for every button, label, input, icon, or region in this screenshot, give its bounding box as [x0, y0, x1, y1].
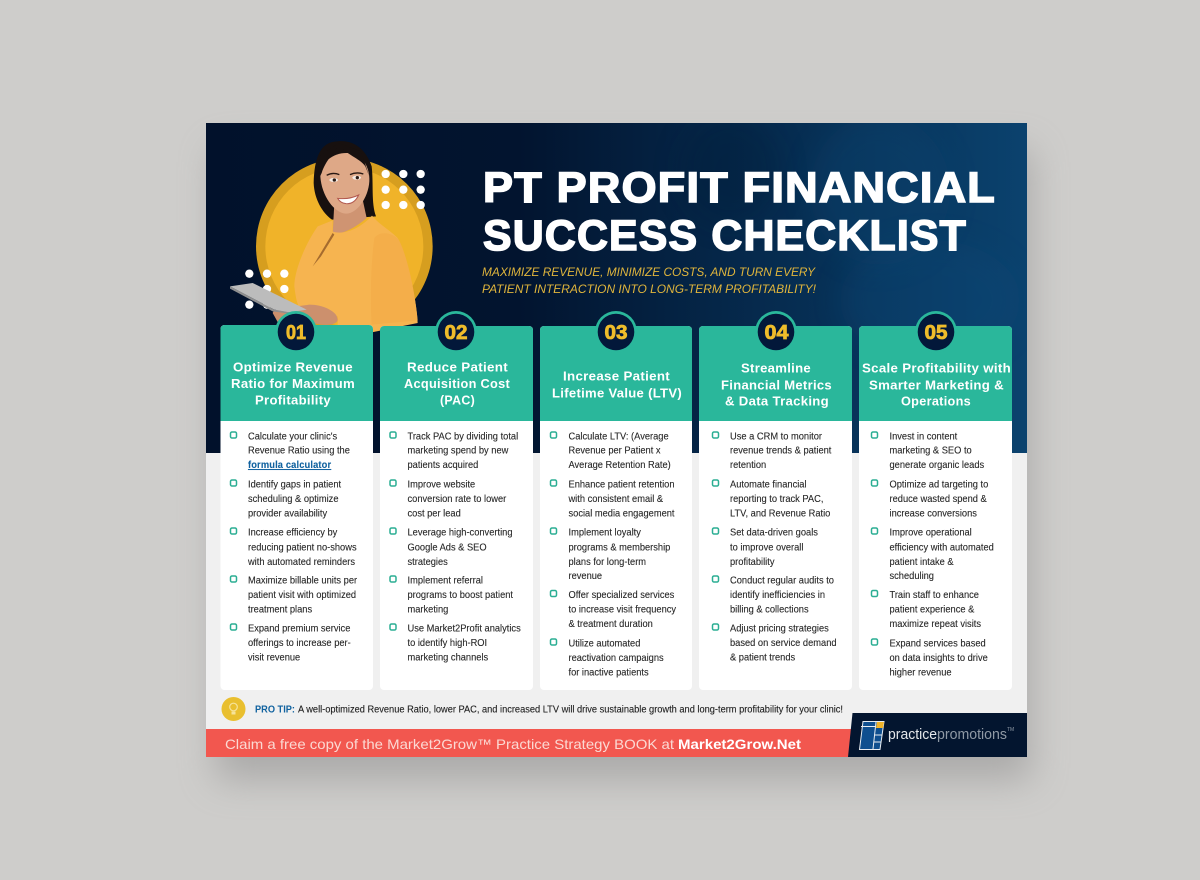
checklist 02	[390, 431, 521, 664]
panel: step 04 metrics tracking	[699, 311, 852, 690]
checklist 05	[872, 431, 994, 679]
badge 03	[595, 311, 637, 353]
checklist 01: with automated reminders	[247, 557, 355, 568]
heading 02: (PAC)	[440, 392, 475, 408]
checklist 02: programs to boost patient	[407, 590, 513, 601]
badge 01	[275, 311, 317, 353]
checklist 03: Average Retention Rate)	[568, 460, 671, 471]
badge 01: 01	[286, 322, 306, 344]
heading 02: Reduce Patient	[407, 360, 508, 374]
logo: practice promotions	[848, 713, 1027, 757]
checklist 02: conversion rate to lower	[407, 494, 506, 505]
checklist 04: to improve overall	[730, 542, 803, 554]
checklist 04: Use a CRM to monitor	[730, 431, 822, 443]
checklist 05: generate organic leads	[889, 460, 984, 471]
checklist 05: efficiency with automated	[889, 542, 994, 554]
checklist 01: provider availability	[248, 508, 327, 520]
title	[483, 164, 996, 260]
subtitle	[482, 265, 817, 296]
checklist 04: Conduct regular audits to	[730, 575, 834, 587]
pro tip text: PRO TIP:	[255, 704, 295, 716]
checklist 03: with consistent email &	[567, 494, 664, 505]
checklist 01: reducing patient no-shows	[248, 542, 357, 554]
checklist 04: identify inefficiencies in	[730, 590, 825, 601]
logo: practice promotions: promotions	[937, 727, 1007, 743]
checklist 01: Identify gaps in patient	[248, 479, 341, 491]
checklist 01: Revenue Ratio using the	[248, 445, 350, 457]
checklist 04: Automate financial	[730, 479, 807, 491]
heading 03	[552, 368, 682, 400]
heading 01: Optimize Revenue	[233, 360, 353, 374]
checklist 02: Use Market2Profit analytics	[407, 623, 521, 635]
heading 04	[721, 360, 832, 408]
checklist 05: reduce wasted spend &	[889, 494, 987, 505]
checklist 05: Expand services based	[889, 638, 986, 650]
checklist 01: Increase efficiency by	[248, 527, 338, 539]
checklist 04: Set data-driven goals	[730, 527, 818, 539]
badge 02	[435, 311, 477, 353]
panel: step 05 scale profitability	[859, 311, 1012, 690]
badge 04: 04	[764, 322, 789, 344]
checklist 05: patient intake &	[889, 557, 954, 568]
checklist 03: programs & membership	[568, 542, 670, 554]
icon: lightbulb	[222, 697, 246, 721]
checklist 04	[712, 431, 837, 664]
title: PT PROFIT FINANCIAL	[483, 164, 996, 212]
banner: claim free book: Claim a free copy of the Market2Grow™ Practice Strategy BOOK at	[225, 736, 674, 752]
subtitle: PATIENT INTERACTION INTO LONG-TERM PROFITABILITY!	[482, 282, 817, 296]
checklist 03	[550, 431, 676, 679]
checklist 01: visit revenue	[248, 652, 300, 664]
subtitle: MAXIMIZE REVENUE, MINIMIZE COSTS, AND TURN EVERY	[482, 265, 816, 279]
checklist 02: to identify high-ROI	[407, 638, 487, 649]
checklist 04: profitability	[730, 557, 775, 568]
panel: step 01 revenue ratio	[220, 311, 373, 690]
checklist 04: retention	[730, 460, 766, 471]
checklist 05: higher revenue	[889, 667, 952, 679]
checklist 01: patient visit with optimized	[248, 590, 356, 601]
checklist 05: scheduling	[889, 571, 934, 582]
checklist 01: Maximize billable units per	[248, 575, 357, 587]
page shadow	[216, 150, 1031, 780]
checklist 03: Calculate LTV: (Average	[568, 431, 669, 443]
checklist 05: patient experience &	[889, 604, 975, 616]
checklist 03: Implement loyalty	[568, 527, 641, 539]
heading 02: Acquisition Cost	[404, 376, 510, 391]
page background	[206, 123, 1027, 757]
title: SUCCESS CHECKLIST	[483, 212, 967, 260]
banner: claim free book: Market2Grow.Net	[678, 736, 801, 752]
checklist 03: plans for long-term	[568, 557, 646, 568]
pro tip text: A well-optimized Revenue Ratio, lower PAC, and increased LTV will drive sustainable growth and long-term profitability for your clinic!	[298, 704, 843, 716]
checklist 03: Enhance patient retention	[568, 479, 675, 491]
badge 05: 05	[924, 322, 948, 344]
badge 05	[915, 311, 957, 353]
checklist 05: Train staff to enhance	[889, 590, 979, 601]
heading 04: Streamline	[741, 360, 811, 376]
checklist 02: patients acquired	[407, 460, 478, 471]
heading 05	[862, 360, 1011, 408]
checklist 02: strategies	[407, 557, 448, 568]
checklist 03: to increase visit frequency	[568, 604, 676, 616]
checklist 03: & treatment duration	[568, 619, 653, 630]
checklist 02: marketing	[407, 604, 448, 616]
checklist 05: marketing & SEO to	[889, 445, 972, 457]
checklist 02: cost per lead	[407, 508, 461, 520]
panel: step 02 acquisition cost	[380, 311, 533, 690]
heading 03: Lifetime Value (LTV)	[552, 386, 682, 400]
checklist 01: Calculate your clinic's	[248, 431, 337, 443]
checklist 02: Google Ads & SEO	[407, 542, 487, 554]
portrait: woman with tablet and gold circle	[230, 141, 433, 335]
checklist 05: on data insights to drive	[889, 653, 988, 664]
checklist 01: offerings to increase per-	[248, 638, 351, 649]
checklist 05: increase conversions	[889, 508, 977, 520]
heading 01	[231, 360, 355, 408]
badge 04	[755, 311, 797, 353]
checklist 03: reactivation campaigns	[568, 653, 664, 664]
checklist 04: reporting to track PAC,	[730, 494, 823, 505]
checklist 02: Implement referral	[407, 575, 483, 587]
checklist 05: Improve operational	[889, 527, 972, 539]
checklist 04: & patient trends	[730, 652, 795, 664]
checklist 01	[230, 431, 357, 664]
badge 02: 02	[444, 322, 468, 344]
checklist 04: billing & collections	[730, 604, 809, 616]
checklist 03: revenue	[568, 571, 602, 582]
heading 04: Financial Metrics	[721, 378, 832, 392]
checklist 03: Revenue per Patient x	[568, 445, 661, 457]
checklist 02: marketing channels	[407, 652, 488, 664]
checklist 01: scheduling & optimize	[248, 494, 339, 505]
heading 05: Scale Profitability with	[862, 360, 1011, 376]
checklist 05: Invest in content	[889, 431, 958, 443]
checklist 03: Utilize automated	[568, 638, 640, 650]
checklist 01: Expand premium service	[248, 623, 350, 635]
banner: claim free book	[206, 729, 852, 757]
checklist 05: maximize repeat visits	[889, 619, 981, 630]
infographic canvas	[203, 123, 1044, 793]
checklist 04: revenue trends & patient	[730, 445, 832, 457]
heading 01: Ratio for Maximum	[231, 376, 355, 391]
checklist 04: LTV, and Revenue Ratio	[730, 508, 830, 520]
checklist 04: Adjust pricing strategies	[730, 623, 829, 635]
checklist 03: social media engagement	[568, 508, 675, 520]
checklist 02: marketing spend by new	[407, 445, 508, 457]
logo: practice promotions: practice	[888, 727, 937, 743]
checklist 03: Offer specialized services	[568, 590, 675, 601]
checklist 01: treatment plans	[248, 604, 312, 616]
heading 03: Increase Patient	[563, 368, 670, 384]
heading 02	[404, 360, 510, 408]
checklist 04: based on service demand	[730, 638, 837, 649]
checklist 02: Track PAC by dividing total	[407, 431, 518, 443]
checklist 02: Leverage high-converting	[407, 527, 513, 539]
heading 05: Smarter Marketing &	[869, 378, 1004, 392]
heading 04: & Data Tracking	[725, 394, 829, 408]
heading 01: Profitability	[255, 392, 331, 408]
header band	[206, 115, 1027, 453]
checklist 02: Improve website	[407, 479, 475, 491]
checklist 05: Optimize ad targeting to	[889, 479, 988, 491]
heading 05: Operations	[901, 394, 971, 408]
logo: practice promotions: TM	[1007, 727, 1014, 733]
badge 03: 03	[604, 322, 628, 344]
checklist 03: for inactive patients	[568, 667, 649, 679]
checklist 01: formula calculator	[248, 460, 331, 471]
panel: step 03 lifetime value	[540, 311, 692, 690]
